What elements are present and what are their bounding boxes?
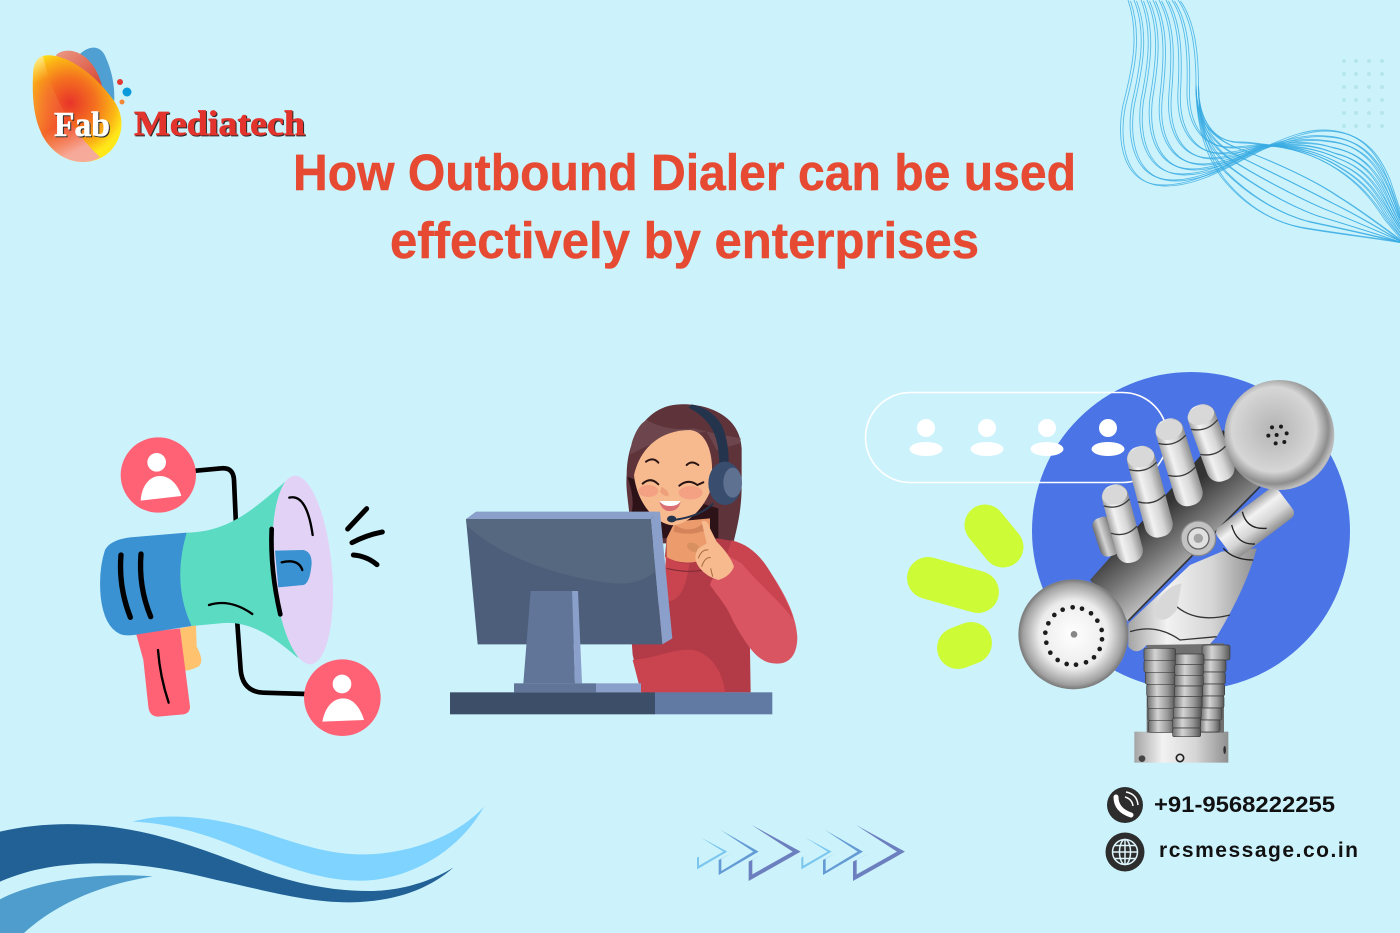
contact pill <box>866 392 1168 482</box>
connector lines <box>196 468 307 694</box>
face <box>634 430 712 525</box>
finger 2 <box>1152 415 1206 509</box>
finger 3 <box>1124 443 1176 540</box>
hand <box>685 521 734 580</box>
decorative wave line mesh <box>1120 0 1400 242</box>
collar light area <box>663 557 689 601</box>
hair shadow <box>627 477 718 538</box>
collar line <box>667 568 703 571</box>
neck shadow <box>673 522 707 534</box>
contact icons <box>910 419 1124 456</box>
logo red petal <box>56 51 104 95</box>
wrist joint <box>1181 521 1216 556</box>
sleeve <box>710 540 797 664</box>
phone number: +91-9568222255 <box>1154 792 1335 817</box>
back knuckles <box>1090 515 1122 559</box>
shoulder <box>727 540 793 619</box>
title line 1: How Outbound Dialer can be used <box>293 144 1076 201</box>
megaphone opening <box>265 473 340 667</box>
megaphone handle <box>136 628 190 717</box>
logo dots <box>117 79 132 104</box>
lime accents <box>928 525 1003 648</box>
thumb segment <box>1213 485 1297 560</box>
monitor stand <box>514 591 641 692</box>
mouth <box>659 501 681 511</box>
decorative dot grid <box>1342 59 1384 128</box>
finger 1 <box>1184 401 1238 485</box>
phone handle <box>1090 430 1262 622</box>
headset <box>667 404 742 522</box>
desk <box>450 692 772 714</box>
robot arm <box>1018 380 1334 763</box>
eyes and brows <box>643 459 703 486</box>
forearm and palm <box>1128 548 1257 651</box>
torso light area <box>633 650 725 692</box>
arrows <box>697 825 905 881</box>
user badge bottom <box>304 659 381 736</box>
neck <box>665 518 710 564</box>
title line 2: effectively by enterprises <box>390 212 979 269</box>
title <box>293 144 1076 269</box>
logo blue petal <box>36 48 114 150</box>
base cylinder <box>1134 732 1228 763</box>
illustration: robot hand holding phone <box>866 372 1350 763</box>
megaphone inner tube <box>275 550 312 587</box>
dark wave <box>0 824 453 902</box>
megaphone trigger <box>180 625 201 671</box>
hair <box>626 404 742 543</box>
earpiece <box>1224 380 1334 490</box>
contact: phone <box>1107 787 1335 823</box>
logo main petal shading <box>33 56 100 162</box>
hair highlight <box>630 420 741 455</box>
logo: Fab Mediatech <box>33 48 305 162</box>
megaphone line details <box>121 497 313 703</box>
nose <box>660 487 669 497</box>
sound lines <box>348 509 382 565</box>
website address: rcsmessage.co.in <box>1159 839 1358 862</box>
megaphone body <box>100 533 192 635</box>
globe icon <box>1106 832 1144 872</box>
hidden thumb <box>1153 583 1182 620</box>
spring stack <box>1144 645 1230 737</box>
megaphone horn <box>180 482 298 658</box>
phone icon <box>1107 787 1143 823</box>
blue circle <box>1032 372 1350 690</box>
palm seam <box>1130 607 1230 640</box>
bottom-left waves <box>0 807 484 933</box>
logo word: Mediatech: Mediatech <box>134 104 305 143</box>
cheeks <box>638 485 703 499</box>
user badge top <box>121 437 196 513</box>
contact: website <box>1106 832 1358 872</box>
mid wave <box>0 875 153 933</box>
spring stack backing <box>1147 643 1224 733</box>
logo word: Fab: Fab <box>54 105 110 144</box>
chevrons set 1 <box>697 825 801 881</box>
illustration: megaphone with users <box>100 437 382 736</box>
light wave <box>133 807 484 881</box>
finger 4 <box>1099 482 1146 566</box>
monitor <box>466 512 672 644</box>
handle lower edge <box>1128 487 1260 621</box>
chevrons set 2 <box>801 825 905 881</box>
logo main petal <box>33 55 121 162</box>
torso <box>632 538 751 692</box>
mouthpiece <box>1018 579 1128 689</box>
illustration: call agent at computer <box>450 404 797 714</box>
